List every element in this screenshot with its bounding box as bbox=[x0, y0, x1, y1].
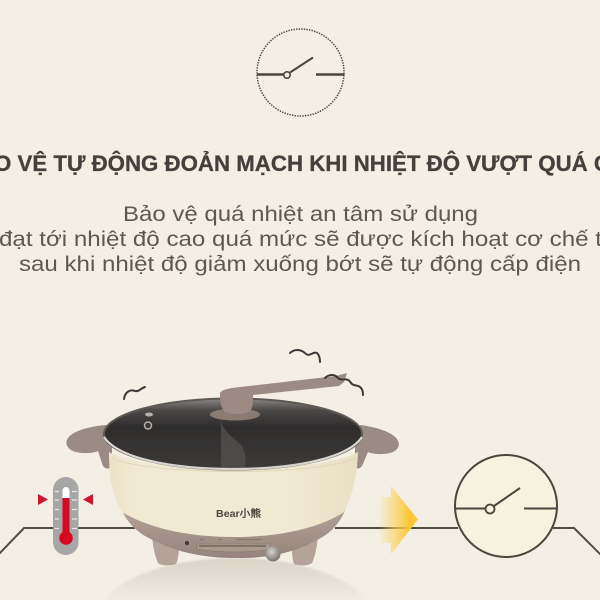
pedestal under pot bbox=[106, 558, 364, 600]
lid collar bbox=[210, 408, 260, 420]
body text: đạt tới nhiệt độ cao quá mức sẽ được kích hoạt cơ chế t bbox=[0, 228, 600, 251]
icon: left red marker bbox=[38, 494, 48, 505]
left handle bbox=[66, 425, 112, 469]
steam squiggle left bbox=[124, 387, 145, 399]
lid knob bbox=[220, 373, 347, 414]
pot base bbox=[121, 508, 346, 558]
body text: sau khi nhiệt độ giảm xuống bớt sẽ tự động cấp điện bbox=[19, 253, 581, 276]
body text bbox=[0, 203, 600, 276]
circuit line bbox=[0, 528, 600, 556]
lid rim bbox=[104, 398, 362, 470]
icon: open switch in dotted circle bbox=[257, 29, 344, 116]
right handle bbox=[355, 425, 399, 469]
panel slot bbox=[199, 545, 266, 547]
control knob bbox=[266, 546, 280, 562]
pot body bbox=[109, 452, 358, 537]
icon: thermometer bbox=[38, 477, 93, 555]
glass lid bbox=[104, 398, 362, 470]
hot pot bbox=[66, 350, 399, 565]
pot divider bbox=[221, 421, 245, 468]
icon: closed-circle switch bbox=[455, 455, 557, 557]
steam squiggle top bbox=[290, 350, 320, 362]
body text: Bảo vệ quá nhiệt an tâm sử dụng bbox=[123, 203, 478, 226]
icon: right red marker bbox=[83, 494, 93, 505]
power jack bbox=[185, 541, 189, 545]
lid rim highlight bbox=[104, 437, 362, 469]
title: O VỆ TỰ ĐỘNG ĐOẢN MẠCH KHI NHIỆT ĐỘ VƯỢT QUÁ C bbox=[0, 151, 600, 176]
right foot bbox=[292, 535, 318, 565]
panel icons bbox=[200, 538, 262, 540]
base front panel bbox=[197, 544, 270, 552]
left foot bbox=[152, 535, 179, 565]
logo: Bear小熊 bbox=[216, 507, 261, 520]
lid vents bbox=[144, 422, 152, 429]
icon: yellow arrow bbox=[379, 486, 418, 554]
body seam bbox=[112, 458, 356, 472]
steam squiggle right bbox=[325, 375, 363, 395]
